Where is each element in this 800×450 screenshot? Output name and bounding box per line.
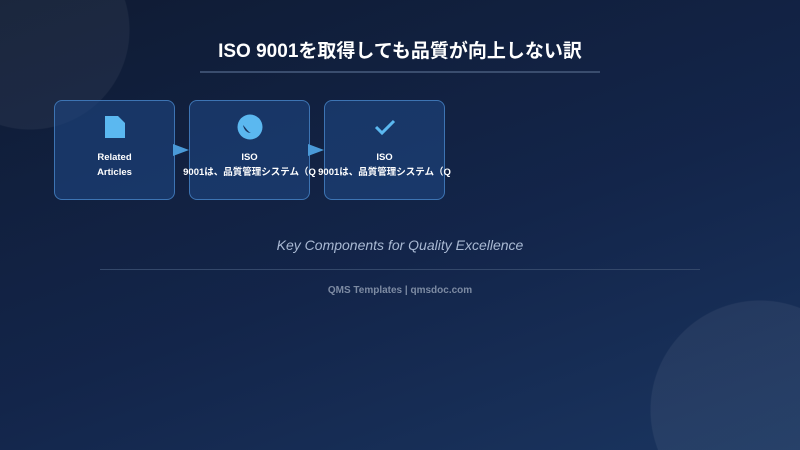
label <box>97 152 132 178</box>
icon: circle <box>238 114 262 140</box>
arrow <box>308 144 324 156</box>
label: Related <box>97 152 132 163</box>
footer: QMS Templates | qmsdoc.com <box>328 285 472 296</box>
icon: check <box>375 120 395 135</box>
label: 9001は、品質管理システム（Q <box>183 167 316 178</box>
subtitle: Key Components for Quality Excellence <box>277 237 523 253</box>
label <box>318 152 451 178</box>
label: Articles <box>97 167 132 178</box>
label: ISO <box>376 152 393 163</box>
label: 9001は、品質管理システム（Q <box>318 167 451 178</box>
card: ISO 9001 check <box>324 100 445 200</box>
arrow <box>173 144 189 156</box>
card: related articles <box>54 100 175 200</box>
title: ISO 9001を取得しても品質が向上しない訳 <box>218 41 582 62</box>
label: ISO <box>241 152 258 163</box>
card: ISO 9001 <box>189 100 310 200</box>
label <box>183 152 316 178</box>
icon: document <box>105 116 125 138</box>
